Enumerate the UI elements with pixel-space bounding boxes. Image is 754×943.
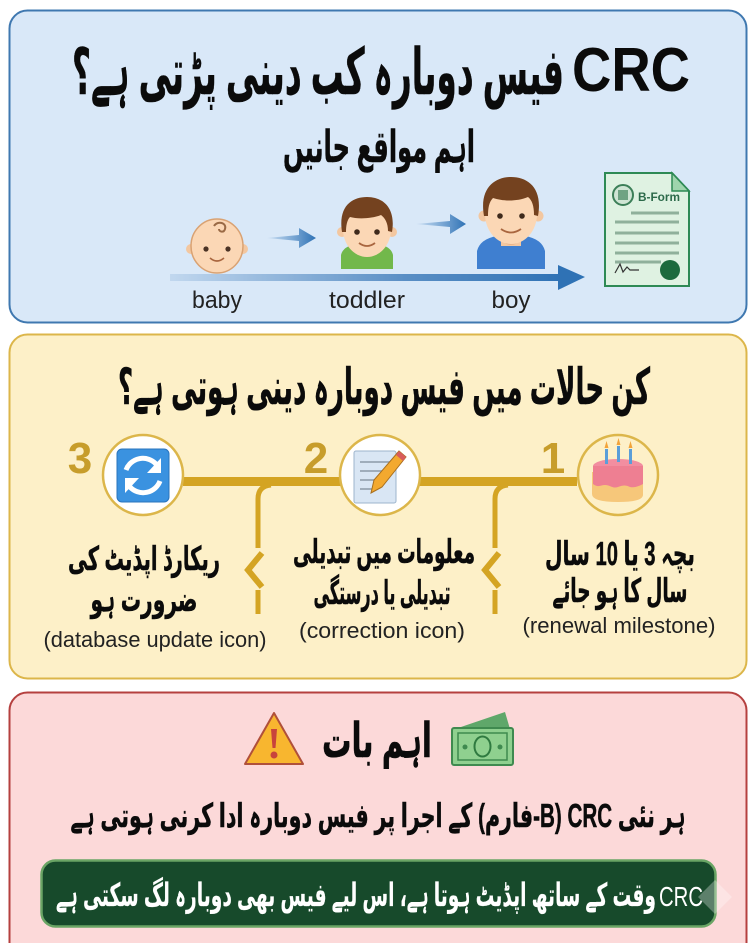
step 2 text: (correction icon) (299, 618, 465, 643)
label: toddler: toddler (329, 287, 405, 314)
icon: B-Form document (605, 173, 689, 286)
step 3 text (44, 540, 266, 652)
icon: birthday cake (578, 435, 658, 515)
number 1: 1 (541, 434, 565, 483)
icon: toddler (337, 197, 397, 269)
connector line (183, 482, 577, 614)
step 1 text: (renewal milestone) (522, 613, 716, 638)
panel: important note (10, 692, 746, 943)
icon: correction (340, 435, 420, 515)
panel: situations (10, 334, 746, 678)
icon: database update (103, 435, 183, 515)
step 1 text (522, 535, 716, 638)
step 2 text: معلومات میں تبدیلی (293, 533, 475, 572)
icon: warning (245, 713, 303, 764)
callout: green banner (42, 860, 732, 926)
label: boy: boy (492, 287, 530, 314)
subtitle: اہم مواقع جانیں (283, 123, 475, 173)
icon: B-Form document: B-Form (638, 190, 680, 204)
icon: boy (477, 177, 545, 269)
icon: money (452, 712, 513, 765)
step 2 text (293, 533, 475, 643)
label: baby: baby (192, 287, 242, 314)
number 2: 2 (304, 434, 328, 483)
arrow: toddler to boy (416, 214, 466, 234)
title: CRC (572, 36, 690, 105)
step 2 text: تبدیلی یا درستگی (314, 573, 450, 612)
arrow: baby to toddler (267, 228, 316, 248)
panel: header (10, 10, 746, 322)
number 3: 3 (68, 434, 92, 483)
step 1 text: بچہ 3 یا 10 سال (545, 535, 695, 573)
icon: baby (186, 219, 248, 273)
heading: important: اہم بات (322, 715, 432, 769)
callout: green banner: CRC (659, 881, 703, 912)
timeline arrow (170, 265, 585, 290)
step 3 text: (database update icon) (44, 627, 266, 652)
step 3 text: ریکارڈ اپڈیٹ کی (68, 540, 220, 578)
step 3 text: ضرورت ہو (89, 581, 198, 620)
